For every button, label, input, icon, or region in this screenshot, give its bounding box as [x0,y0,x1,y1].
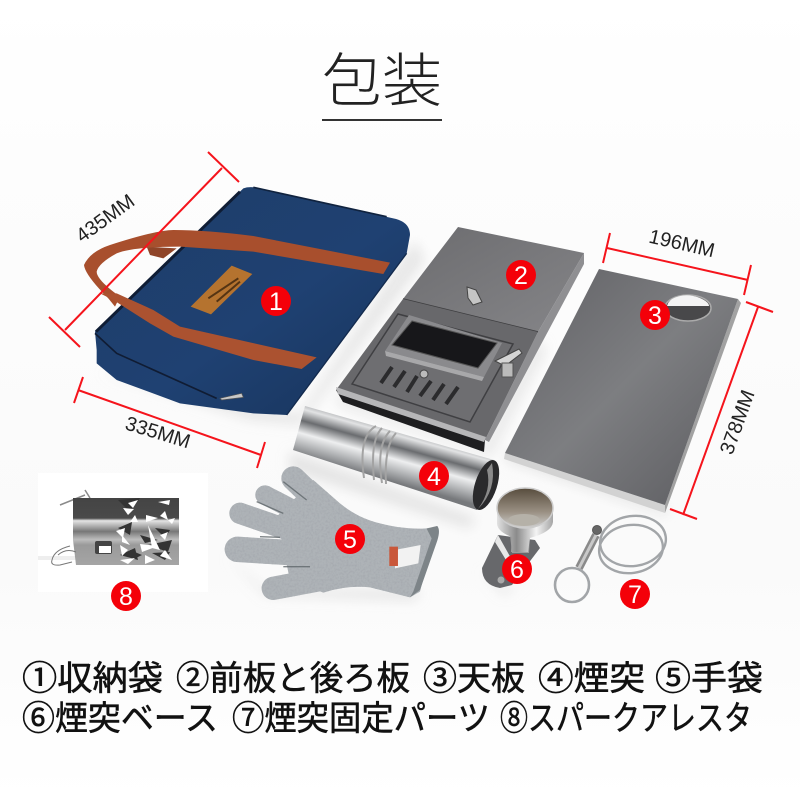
parts list caption: ⑥煙突ベース [22,691,218,740]
number badge 3 [640,300,670,330]
parts list caption: ③天板 [423,651,525,700]
bag [84,187,410,415]
parts list caption: ⑧スパークアレスタ [500,691,752,740]
number badge 6 [502,554,532,584]
number badge 3: 3 [648,302,662,330]
top plate [504,269,741,513]
number badge 4: 4 [427,463,441,491]
number badge 7 [620,579,650,609]
dimension: bag width 335MM: 335MM [123,413,193,453]
number badge 8: 8 [119,583,133,611]
dimension: plate length 378MM [670,302,773,519]
number badge 1 [261,286,291,316]
parts list caption: ⑦煙突固定パーツ [232,691,490,740]
dimension: plate width 196MM [603,226,751,295]
dimension: bag width 335MM [74,377,265,468]
chimney [293,406,504,513]
bag leather patch [191,266,252,314]
fixing clamp [555,512,669,602]
parts list caption: ④煙突 [538,651,645,700]
number badge 7: 7 [628,581,642,609]
number badge 6: 6 [510,556,524,584]
number badge 4 [419,461,449,491]
parts list caption [22,651,763,740]
number badge 2 [506,260,536,290]
chimney base [482,488,553,588]
spark arrester panel [38,473,208,592]
number badge 1: 1 [269,288,283,316]
dimension: bag length 435MM: 435MM [72,190,139,247]
number badge 2: 2 [514,262,528,290]
bag rear handle [147,247,177,258]
parts list caption: ②前板と後ろ板 [176,651,410,700]
number badge 5: 5 [343,526,357,554]
dimension: plate length 378MM: 378MM [716,387,760,457]
stove front panel with window [336,299,538,452]
dimension: plate width 196MM: 196MM [647,226,717,262]
title: 包装 [322,34,442,118]
bag front handle [100,293,317,369]
stove back panel [403,227,584,442]
number badge 8 [111,581,141,611]
glove [237,478,439,597]
number badge 5 [335,524,365,554]
parts list caption: ①収納袋 [22,651,163,700]
parts list caption: ⑤手袋 [655,651,763,700]
dimension: bag length 435MM [49,152,239,347]
